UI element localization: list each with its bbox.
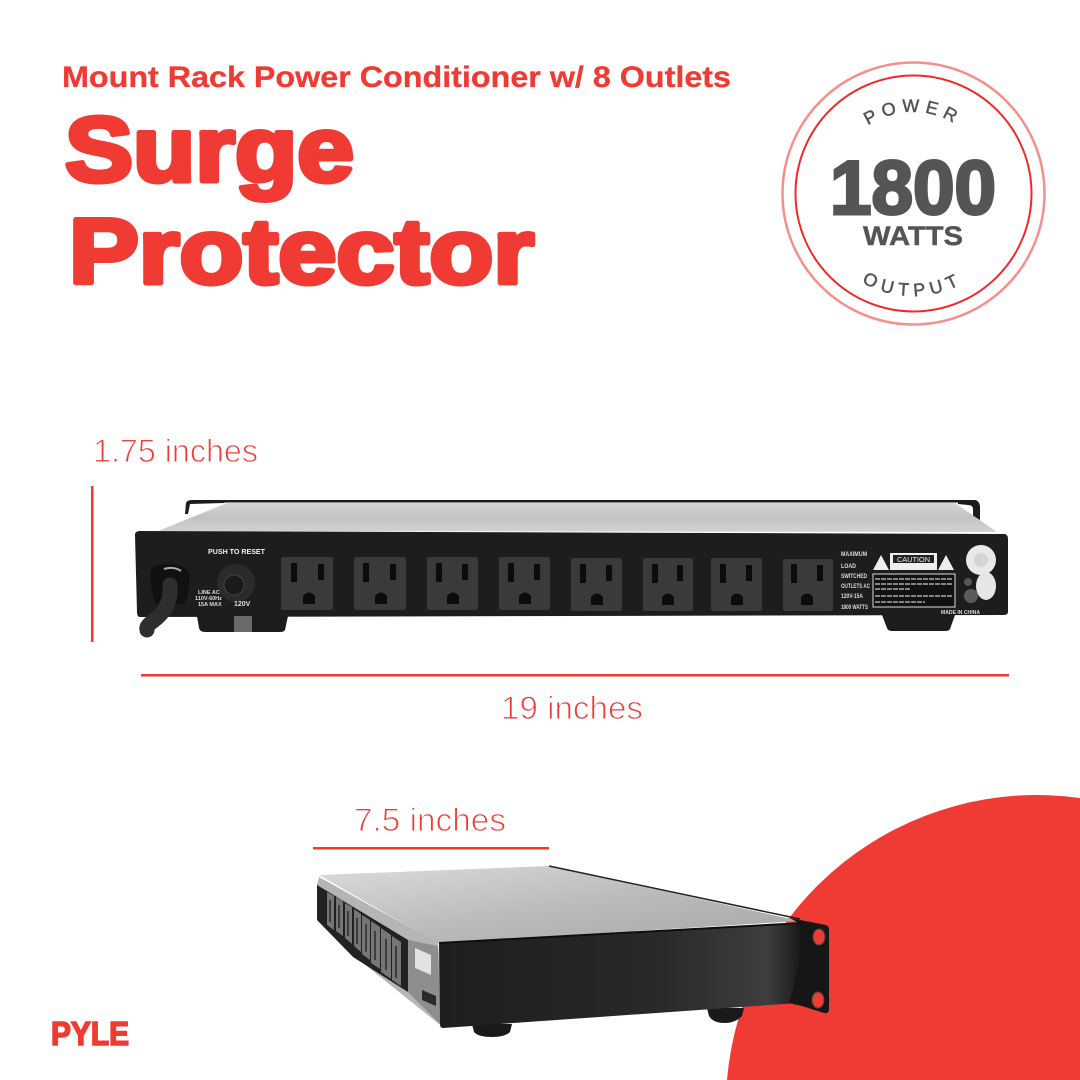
- side panel: [439, 923, 803, 1028]
- reset button: PUSH TO RESET: [208, 547, 265, 556]
- reset button: 15A MAX: [198, 602, 222, 608]
- feet: [197, 616, 288, 632]
- feet: [472, 1024, 512, 1037]
- outlet row backing: [317, 885, 408, 992]
- outlet slots: [291, 563, 823, 605]
- rating label: 120V-15A: [841, 593, 863, 600]
- rating label: [841, 551, 870, 611]
- title: Protector: [69, 201, 534, 303]
- reset button: 110V-60Hz: [195, 596, 222, 602]
- title: Surge: [65, 99, 354, 201]
- rating label: 1800 WATTS: [841, 604, 868, 611]
- rating label: LOAD: [841, 563, 856, 570]
- reset button: [195, 547, 265, 608]
- outlet side: [317, 877, 444, 1028]
- top plate: [319, 866, 800, 943]
- sockets and breaker: [964, 545, 996, 603]
- outlet slots: [330, 900, 396, 978]
- outlets: [281, 557, 833, 611]
- width dimension: 19 inches: [501, 690, 643, 726]
- outlets: [327, 892, 401, 986]
- reset button: LINE AC: [198, 590, 220, 596]
- top plate: [158, 503, 997, 532]
- height dimension: 1.75 inches: [93, 433, 258, 469]
- badge value: 1800: 1800: [830, 146, 996, 231]
- rack ears and top edge: [225, 500, 965, 502]
- logo: Pyle: PYLE: [51, 1015, 129, 1052]
- mount holes: [813, 929, 825, 945]
- rating label: MAXIMUM: [841, 551, 867, 558]
- badge label: power: POWER: [863, 99, 957, 125]
- depth dimension: 7.5 inches: [354, 802, 506, 838]
- reset button: 120V: [234, 601, 251, 608]
- rating label: SWITCHED: [841, 573, 867, 580]
- badge: 1800 watts power output: [781, 61, 1046, 326]
- power cord: [147, 564, 189, 630]
- subtitle: Mount Rack Power Conditioner w/ 8 Outlets: [62, 61, 731, 94]
- caution label: MADE IN CHINA: [941, 610, 980, 616]
- badge unit: watts: WATTS: [863, 221, 963, 251]
- background circle: [727, 795, 1080, 1080]
- rack ear: [789, 918, 829, 1013]
- title: [65, 99, 534, 303]
- side label panel: [408, 940, 440, 1024]
- rear view of power conditioner: [135, 500, 1008, 632]
- caution label: CAUTION: [897, 555, 930, 564]
- caution label: [873, 553, 980, 616]
- badge label: output: OUTPUT: [864, 273, 956, 296]
- chassis: [135, 531, 1008, 617]
- side view of power conditioner: [317, 866, 829, 1037]
- rating label: OUTLETS AC: [841, 583, 870, 590]
